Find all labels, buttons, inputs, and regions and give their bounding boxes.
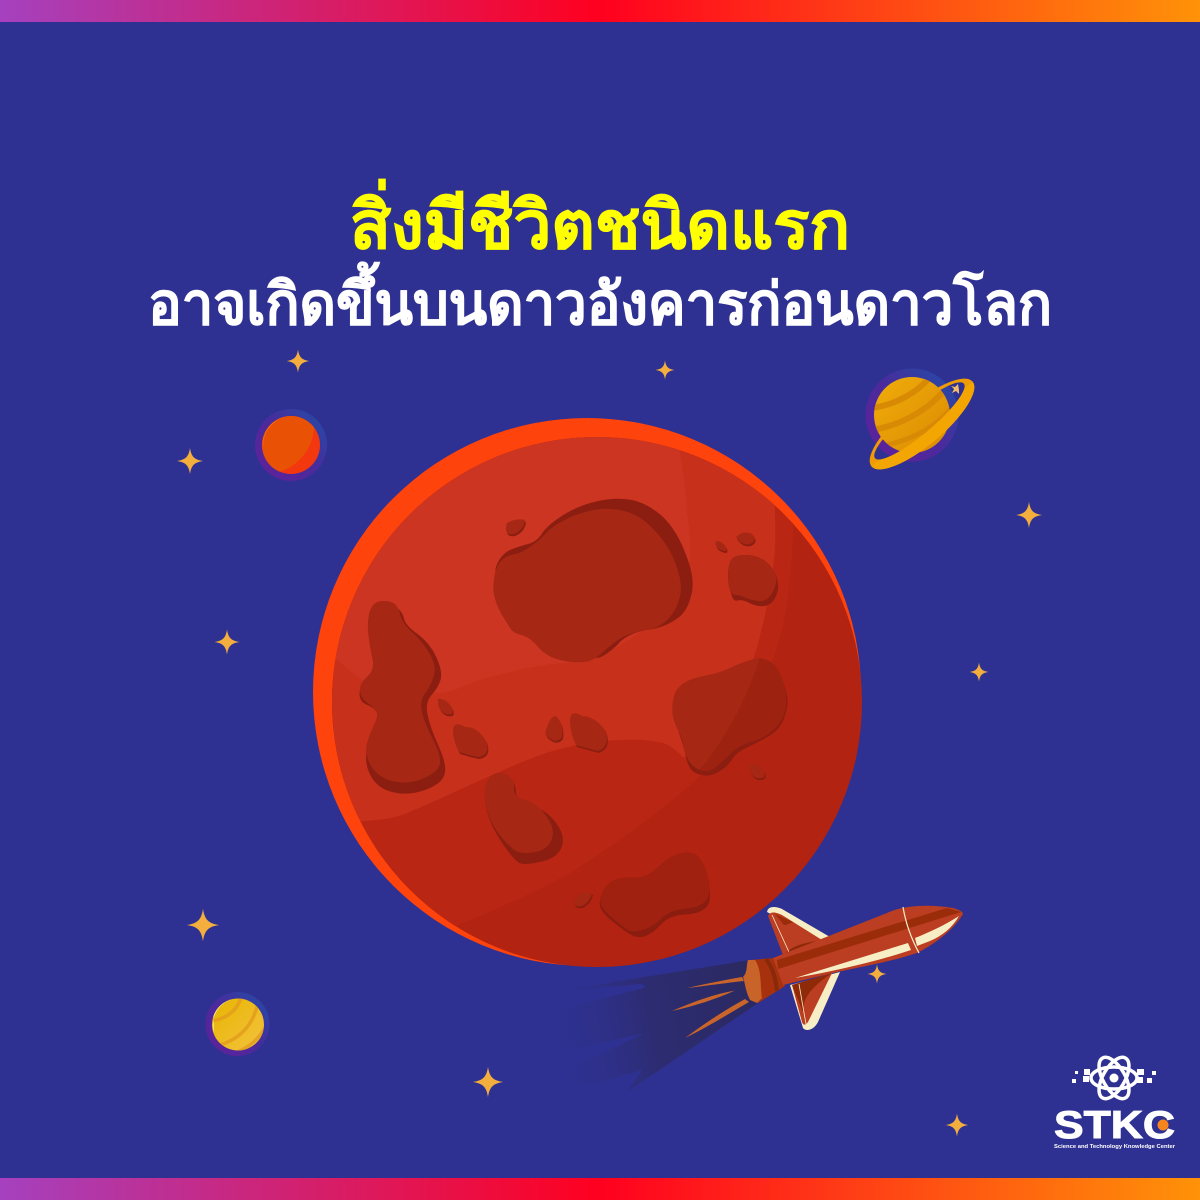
cream stripe [795, 943, 911, 978]
title line 1: สิ่งมีชีวิตชนิดแรก [350, 178, 850, 262]
nose seam [903, 907, 919, 953]
crater: left [360, 601, 445, 794]
stars [177, 349, 1042, 1137]
planet: Mars [313, 418, 880, 990]
band mid [320, 430, 775, 822]
logo: STKC [1054, 1053, 1176, 1150]
exhaust rays [672, 977, 749, 1038]
pixel squares [1072, 1069, 1156, 1083]
engine nozzle [750, 958, 785, 1003]
band light [320, 430, 690, 694]
bottom gradient bar [0, 1178, 1200, 1200]
crater: bottom centre [485, 773, 563, 864]
nose highlight [915, 916, 959, 946]
crater: bottom right [600, 853, 710, 937]
exhaust trail [550, 960, 758, 1096]
crater: upper right [728, 555, 778, 606]
atom emblem [1091, 1053, 1137, 1103]
band mid-dark [332, 450, 794, 926]
title [148, 178, 1052, 337]
title line 2: อาจเกิดขึ้นบนดาวอังคารก่อนดาวโลก [148, 262, 1052, 337]
atom nucleus [1110, 1074, 1118, 1082]
rear wing lower [790, 972, 840, 1030]
crater: top centre [493, 499, 693, 662]
star by rocket [868, 965, 886, 983]
small rocks shadows [439, 521, 766, 908]
crater: right [672, 658, 788, 776]
body [773, 906, 963, 985]
logo wordmark: STKC [1054, 1104, 1175, 1147]
planet: small orange [255, 409, 327, 481]
logo tagline: Science and Technology Knowledge Center [1054, 1144, 1176, 1150]
top gradient bar [0, 0, 1200, 22]
logo orange dot [1158, 1120, 1168, 1130]
rocket [550, 906, 963, 1096]
planet: ringed saturn [866, 368, 974, 470]
body stripe [777, 908, 961, 969]
planet: small yellow [205, 992, 270, 1056]
rear wing upper [767, 907, 830, 942]
small rocks [438, 519, 765, 906]
